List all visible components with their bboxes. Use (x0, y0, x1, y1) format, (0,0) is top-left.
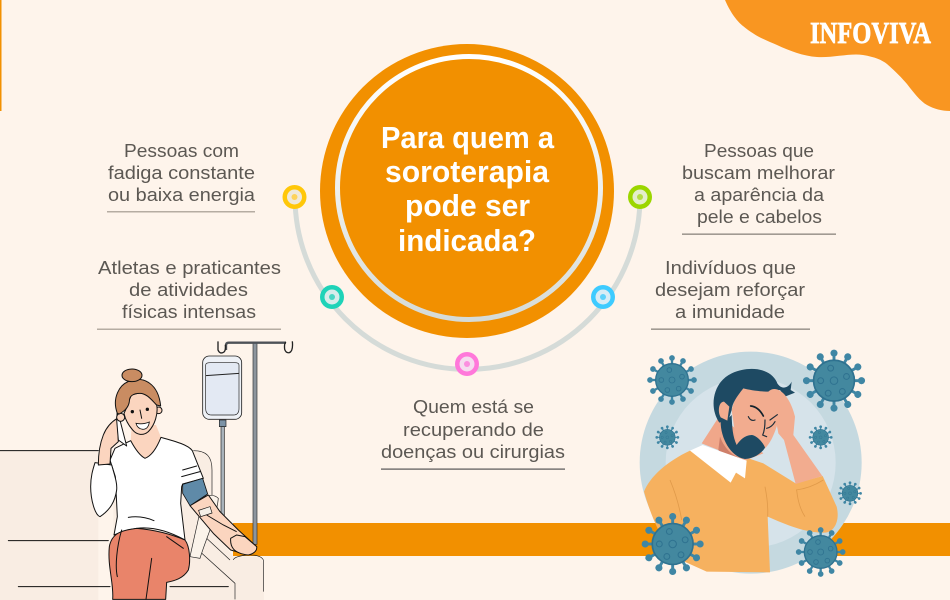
sweater (644, 451, 838, 572)
text block: fatigue: fadiga constante (108, 163, 255, 183)
text block: recovery (381, 397, 565, 470)
text block: immunity: a imunidade (675, 302, 785, 322)
node: pink (455, 352, 479, 376)
hand and arm (768, 389, 822, 484)
woman: blood pressure cuff (183, 478, 208, 506)
text block: appearance: buscam melhorar (682, 163, 835, 183)
bottom band (233, 523, 950, 556)
sofa (0, 451, 98, 600)
text block: athletes: de atividades (129, 280, 248, 300)
collar (690, 445, 747, 483)
heading: Para quem a (381, 120, 555, 155)
node: teal (320, 285, 344, 309)
illustration: man with headache and viruses (640, 350, 865, 577)
viruses (647, 355, 697, 405)
node: blue (591, 285, 615, 309)
woman: torso (110, 437, 203, 540)
left edge accent (0, 0, 2, 111)
node: green (628, 185, 652, 209)
woman: hand (98, 418, 118, 465)
woman: phone (117, 410, 127, 446)
text block: fatigue: Pessoas com (124, 141, 239, 161)
text block: fatigue (107, 141, 256, 212)
woman: neck (131, 425, 161, 458)
heading (381, 120, 555, 258)
pillow (190, 495, 218, 558)
text block: recovery: doenças ou cirurgias (381, 442, 565, 462)
text block: appearance (682, 141, 836, 235)
text block: athletes: Atletas e praticantes (98, 258, 281, 278)
ear (719, 402, 729, 421)
central circle (320, 44, 614, 338)
beard (721, 415, 765, 459)
text block: immunity: desejam reforçar (655, 280, 805, 300)
woman: sleeve (91, 463, 117, 517)
text block: appearance: a aparência da (694, 185, 825, 205)
connector arc (295, 197, 640, 369)
neck (702, 415, 763, 461)
text block: recovery: recuperando de (403, 420, 544, 440)
woman: forearm (190, 495, 257, 555)
face (732, 388, 778, 448)
text block: appearance: pele e cabelos (697, 207, 822, 227)
text block: immunity (651, 258, 810, 330)
IV pole (253, 343, 257, 544)
node: yellow (282, 185, 306, 209)
corner blob (725, 0, 950, 111)
text block: athletes (97, 258, 281, 330)
backdrop circles (640, 352, 862, 574)
heading: indicada? (398, 223, 536, 258)
heading: soroterapia (385, 154, 550, 189)
woman: face (117, 413, 125, 421)
woman: hair (115, 380, 161, 414)
woman: pants (109, 528, 190, 599)
text block: fatigue: ou baixa energia (108, 185, 256, 205)
text block: appearance: Pessoas que (704, 141, 814, 161)
heading: pode ser (405, 188, 530, 223)
IV bag (203, 356, 242, 419)
hair (714, 369, 795, 423)
text block: recovery: Quem está se (413, 397, 534, 417)
illustration: woman on IV drip (0, 341, 293, 600)
text block: athletes: físicas intensas (122, 302, 256, 322)
text block: immunity: Indivíduos que (665, 258, 796, 278)
